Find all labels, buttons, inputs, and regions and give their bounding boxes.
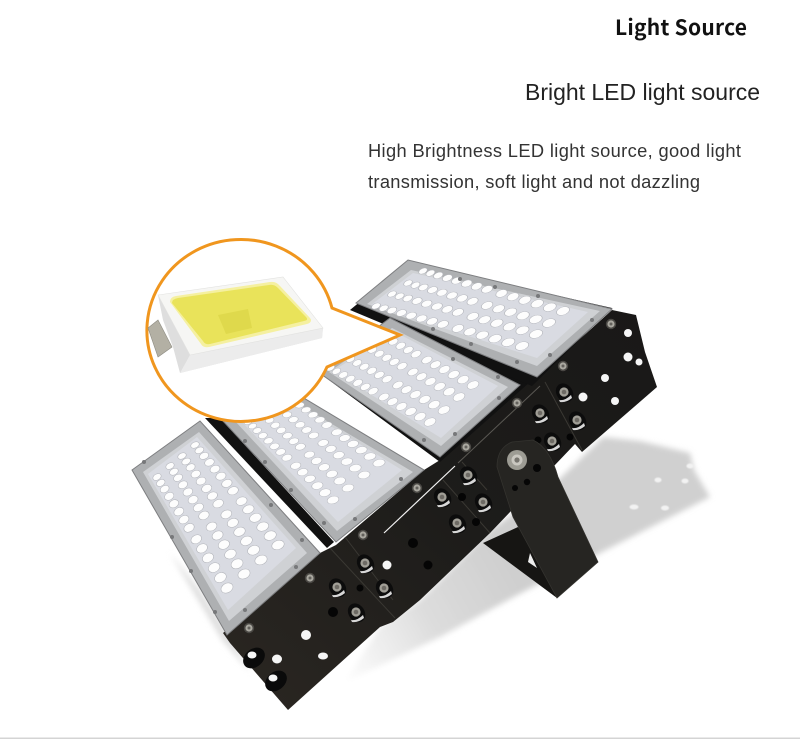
LED module 4: [356, 260, 612, 377]
callout: LED chip magnifier: [147, 239, 400, 421]
white gap in rear leg: [528, 553, 537, 568]
product cast shadow: [170, 437, 710, 682]
flood light fixture: [132, 260, 657, 710]
LED module 1: [132, 421, 320, 635]
description text: [368, 140, 741, 192]
callout bubble: [147, 239, 400, 421]
black housing: [205, 262, 657, 710]
LED module 3: [318, 318, 520, 457]
stand nut: [507, 450, 527, 470]
rim screws: [244, 319, 616, 633]
subheading: Bright LED light source: [525, 79, 760, 105]
stand bracket: [497, 440, 598, 598]
page bottom rule: [0, 738, 800, 739]
description text: High Brightness LED light source, good light: [368, 140, 741, 161]
LED module 2: [222, 385, 424, 542]
slotted bolts: [325, 380, 590, 626]
heading: Light Source: Light Source: [615, 12, 747, 42]
end slots: [239, 643, 291, 696]
mounting holes: [248, 329, 642, 682]
rear bracket leg: [483, 527, 557, 598]
SMD LED chip: [148, 277, 323, 373]
description text: transmission, soft light and not dazzling: [368, 171, 700, 192]
